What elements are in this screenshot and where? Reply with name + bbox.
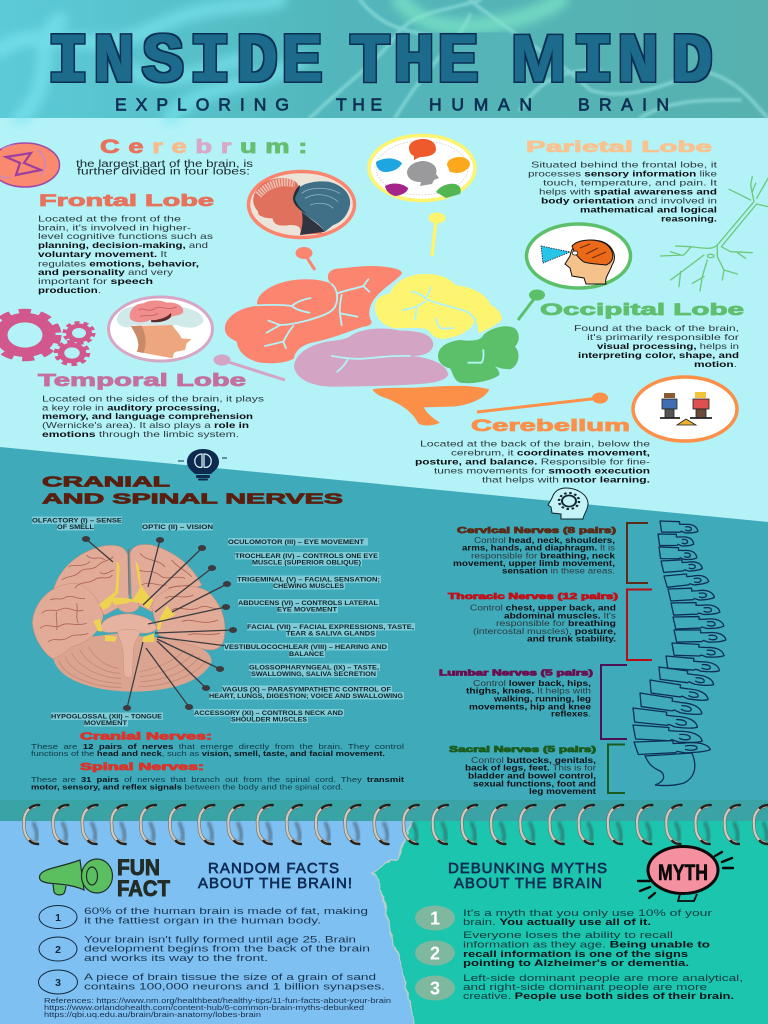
nerve labels: TRIGEMINAL (V) – FACIAL SENSATION; [237,576,380,584]
icon: myth bubble [638,846,733,901]
pons and midbrain [100,599,157,677]
nerve labels: OF SMELL [57,524,94,531]
nerve labels: ACCESSORY (XI) – CONTROLS NECK AND [194,710,343,717]
fact 3 [38,970,385,994]
sacral nerves [449,744,625,796]
spine illustration [631,521,726,786]
heading: random facts: RANDOM FACTS [208,860,339,877]
sacral nerves: back of legs, feet. This is for [465,764,597,772]
cranial nerves summary: Cranial Nerves: [80,732,212,742]
myth 1 [415,906,712,930]
text: occipital lobe: it's primarily responsible for [587,332,739,342]
heading: cerebellum: Cerebellum [471,416,630,435]
bottom right panel: turquoise [372,815,768,1024]
myth 2 [415,930,711,968]
sacral nerves: bladder and bowel control, [468,772,596,780]
nerve labels: VAGUS (X) – PARASYMPATHETIC CONTROL OF [222,686,391,694]
cervical nerves [453,523,648,583]
myth 2: information as they age. Being unable to [463,940,711,950]
cervical nerves: Cervical Nerves (8 pairs) [457,525,616,535]
nerve labels: CHEWING MUSCLES [273,583,345,590]
myth 2: recall information is one of the signs [463,949,688,959]
nerve labels: VESTIBULOCOCHLEAR (VIII) – HEARING AND [224,644,387,651]
thoracic nerves: (intercostal muscles), posture, [473,627,616,636]
sacral nerves: Control buttocks, genitals, [471,756,596,765]
text: temporal lobe: Located on the sides of the brain, it plays [42,394,264,404]
heading: debunking myths: DEBUNKING MYTHS [448,860,607,877]
cervical nerves: sensation in these areas. [502,566,615,576]
text: parietal lobe: processes sensory information like [528,168,717,178]
text: parietal lobe: helps with spatial awareness and [539,186,717,196]
icon: hourglass [0,143,60,187]
nerve label chips [32,516,415,726]
text: cerebellum: posture, and balance. Responsible for fine- [415,456,650,466]
spinal nerves summary: motor, sensory, and reflex signals between the body and the spinal cord. [31,782,343,792]
frontal lobe shape [225,266,402,363]
cervical nerves: Control head, neck, shoulders, [474,536,615,545]
icon: two heads circle [248,172,354,238]
references: https://www.orlandohealth.com/content-hub/6-common-brain-myths-debunked [44,1003,364,1012]
text: parietal lobe: Situated behind the frontal lobe, it [531,160,718,170]
lumbar nerves: thighs, knees. It helps with [466,686,591,696]
sacral nerves: leg movement [529,787,597,796]
text: frontal lobe: Located at the front of the [38,214,181,224]
heading: occipital lobe: Occipital Lobe [540,301,744,319]
cranial nerves summary [31,732,404,758]
myth 3: Left-side dominant people are more analytical, [463,973,743,983]
subtitle: THE [336,94,382,114]
text: cerebellum: cerebrum, it coordinates movement, [451,448,650,458]
fun fact label: FACT [117,876,171,901]
myth 2: pointing to Alzheimer's or dementia. [463,958,689,968]
pointer: parietal [429,213,445,256]
fact 1: 60% of the human brain is made of fat, making [84,906,368,916]
myth 1: 1 [430,908,440,928]
heading: debunking myths: ABOUT THE BRAIN [454,875,602,892]
icon: vision head circle [526,224,630,288]
text: temporal lobe: (Wernicke's area). It also plays a role in [42,420,249,430]
header banner [0,0,768,118]
thoracic nerves: Thoracic Nerves (12 pairs) [448,591,618,601]
nerve labels: SHOULDER MUSCLES [231,716,308,724]
text: frontal lobe: important for speech [38,276,153,286]
text: temporal lobe: memory, and language comprehension [42,411,253,421]
thoracic nerves: and trunk stability. [527,634,616,644]
pointer: occipital [518,290,544,320]
right temporal lobe [152,586,225,650]
nerve labels: TEAR & SALIVA GLANDS [286,630,376,638]
spiral binding rings [24,805,768,844]
spinal nerves summary: Spinal Nerves: [80,762,204,773]
pointer: frontal [296,248,315,270]
lumbar nerves: Control lower back, hips, [473,679,591,688]
text: cerebrum intro [76,159,253,178]
heading: random facts [198,860,352,892]
text: parietal lobe [528,160,718,224]
nerve labels: MUSCLE (SUPERIOR OBLIQUE) [252,560,361,566]
lumbar nerves: movements, hip and knee [469,702,592,712]
nerve labels: ABDUCENS (VI) – CONTROLS LATERAL [238,600,378,607]
text: temporal lobe [42,394,264,439]
myth 2: 2 [430,944,440,964]
nerve labels: BALANCE [289,651,325,658]
fact 3: A piece of brain tissue the size of a grain of sand [84,972,376,982]
nerve labels [32,518,414,727]
subtitle [115,94,669,114]
title: THE [349,24,479,103]
myth 3: 3 [430,978,440,998]
text: cerebellum: tunes movements for smooth execution [434,466,650,476]
fun fact label [117,855,171,901]
lumbar nerves: walking, running, leg [493,694,591,704]
text: occipital lobe: motion . [694,359,737,369]
nerve labels: EYE MOVEMENT [277,606,337,614]
cervical nerves: arms, hands, and diaphragm. It is [462,544,615,552]
title: INSIDE [47,24,323,103]
heading: frontal lobe: Frontal Lobe [39,192,214,210]
subtitle: EXPLORING [115,94,289,114]
fact 3: contains 100,000 neurons and 1 billion synapses. [84,982,385,992]
nerve labels: MOVEMENT [84,720,127,727]
fact 2: 2 [55,944,61,956]
text: cerebellum: Located at the back of the brain, below the [420,438,650,448]
nerve labels: OPTIC (II) – VISION [142,524,213,531]
fact 1 [39,906,368,928]
heading: temporal lobe: Temporal Lobe [38,370,246,390]
nerve labels: OLFACTORY (I) – SENSE [32,518,123,524]
icon: neuron [661,177,768,291]
sacral nerves: sexual functions, foot and [473,780,596,788]
parietal lobe shape [375,274,502,339]
text: frontal lobe: regulates emotions, behavior, [38,258,199,268]
bottom left panel: blue [0,821,415,1024]
spinal nerves summary: These are 31 pairs of nerves that branch out from the spinal cord. They transmit [31,775,405,784]
text: frontal lobe: planning, decision-making, and [38,240,208,250]
heading: cranial and spinal nerves: AND SPINAL NERVES [42,490,343,508]
text: cerebrum intro: the largest part of the brain, is [76,159,253,170]
fact 2 [39,934,370,963]
thoracic nerves [448,590,652,660]
myth 2: Everyone loses the ability to recall [463,930,673,940]
icon: megaphone [39,859,113,895]
icon: head with brain circle [108,297,212,361]
sulci [40,553,220,642]
nerve labels: OCULOMOTOR (III) – EYE MOVEMENT [228,539,364,546]
text: cerebellum [415,438,650,484]
icon: myth bubble: MYTH [658,860,708,885]
text: temporal lobe: emotions through the limbic system. [42,429,239,439]
text: parietal lobe: touch, temperature, and pain. It [543,178,718,188]
text: frontal lobe: and personality and very [38,267,174,277]
heading: parietal lobe: Parietal Lobe [526,139,712,156]
anatomical brain illustration [32,545,225,692]
thoracic nerves: abdominal muscles. It's [504,612,616,620]
occipital lobe shape [438,326,519,383]
title: M [511,21,566,95]
myth 3: and right-side dominant people are more [463,982,707,992]
text: frontal lobe: production . [38,285,101,295]
title [47,21,713,103]
left temporal lobe [32,583,103,659]
heading: random facts: ABOUT THE BRAIN! [198,875,352,892]
icon: head with gear [548,488,588,519]
nerve labels: SWALLOWING, SALIVA SECRETION [251,671,376,678]
icon: gears [0,311,94,365]
spinal nerves summary [31,762,405,792]
fact 2: and works its way to the front. [84,953,268,963]
text: temporal lobe: a key role in auditory processing, [42,402,220,412]
nerve labels: GLOSSOPHARYNGEAL (IX) – TASTE, [249,664,379,672]
pointer: cerebellum [477,393,608,412]
icon: balance circle [633,377,737,441]
thoracic nerves: responsible for breathing [496,619,616,628]
cervical nerves: responsible for breathing, neck [471,552,616,560]
text: parietal lobe: body orientation and involved in [541,196,717,206]
fact 2: development begins from the back of the brain [84,944,370,954]
myth 1: It's a myth that you only use 10% of your [463,908,712,918]
myth 3: creative. People use both sides of their brain. [463,991,734,1001]
fact 1: 1 [55,912,61,924]
text: frontal lobe: brain, it's involved in higher- [38,222,191,232]
text: occipital lobe: Found at the back of the brain, [574,323,739,333]
heading: debunking myths [448,860,607,892]
heading: cerebrum: Ce re br um: [100,137,316,158]
myth 1: brain. You actually use all of it. [463,917,651,927]
text: parietal lobe: mathematical and logical [580,204,717,214]
fun fact label: FUN [117,855,160,880]
fact 1: it the fattiest organ in the human body. [84,916,321,926]
sacral nerves: Sacral Nerves (5 pairs) [449,744,596,754]
text: frontal lobe: voluntary movement. It [38,249,168,259]
references: https://qbi.uq.edu.au/brain/brain-anatomy/lobes-brain [44,1010,261,1019]
icon: senses circle [369,136,475,200]
fact 3: 3 [55,977,61,989]
lumbar nerves [439,665,627,739]
myth 3 [415,973,743,1001]
heading: cranial and spinal nerves [42,474,343,508]
icon: light bulb [178,449,227,480]
lumbar nerves: Lumbar Nerves (5 pairs) [439,668,593,678]
references [44,996,391,1019]
frontal lobes [53,545,202,615]
fact 2: Your brain isn't fully formed until age 25. Brain [84,934,356,944]
nerve labels: TROCHLEAR (IV) – CONTROLS ONE EYE [235,553,379,560]
nerve labels: HYPOGLOSSAL (XII) – TONGUE [51,714,163,720]
heading: cranial and spinal nerves: CRANIAL [42,474,170,490]
lumbar nerves: reflexes . [551,710,591,718]
text: frontal lobe [38,214,213,295]
nerve pointers [82,537,236,710]
binding band [0,800,768,821]
subtitle: HUMAN [429,94,532,114]
nerve labels: FACIAL (VII) – FACIAL EXPRESSIONS, TASTE, [247,624,414,631]
text: occipital lobe: interpreting color, shape, and [578,350,739,360]
text: cerebrum intro: further divided in four lobes: [77,166,250,178]
cerebellum shape [373,386,489,426]
cervical nerves: movement, upper limb movement, [453,559,615,568]
yellow nerves [93,562,176,642]
central coloured brain [225,266,519,426]
text: frontal lobe: level cognitive functions such as [38,231,213,241]
title: IND [572,24,713,103]
cranial nerves summary: These are 12 pairs of nerves that emerge directly from the brain. They control [31,742,404,751]
text: occipital lobe: visual processing, helps in [597,341,739,351]
text: cerebellum: that helps with motor learning. [482,474,650,484]
text: occipital lobe [574,323,739,369]
temporal lobe shape [294,329,448,387]
subtitle: BRAIN [578,94,669,114]
cerebellum [53,633,212,692]
pointer: temporal [214,355,285,380]
text: parietal lobe: reasoning. [661,214,717,224]
cranial nerves summary: functions of the head and neck , such as vision, smell, taste, and facial movement. [31,749,385,758]
thoracic nerves: Control chest, upper back, and [470,604,616,612]
nerve labels: HEART, LUNGS, DIGESTION; VOICE AND SWALLOWING [209,693,403,700]
references: References: https://www.nm.org/healthbeat/healthy-tips/11-fun-facts-about-your-brain [44,996,391,1005]
